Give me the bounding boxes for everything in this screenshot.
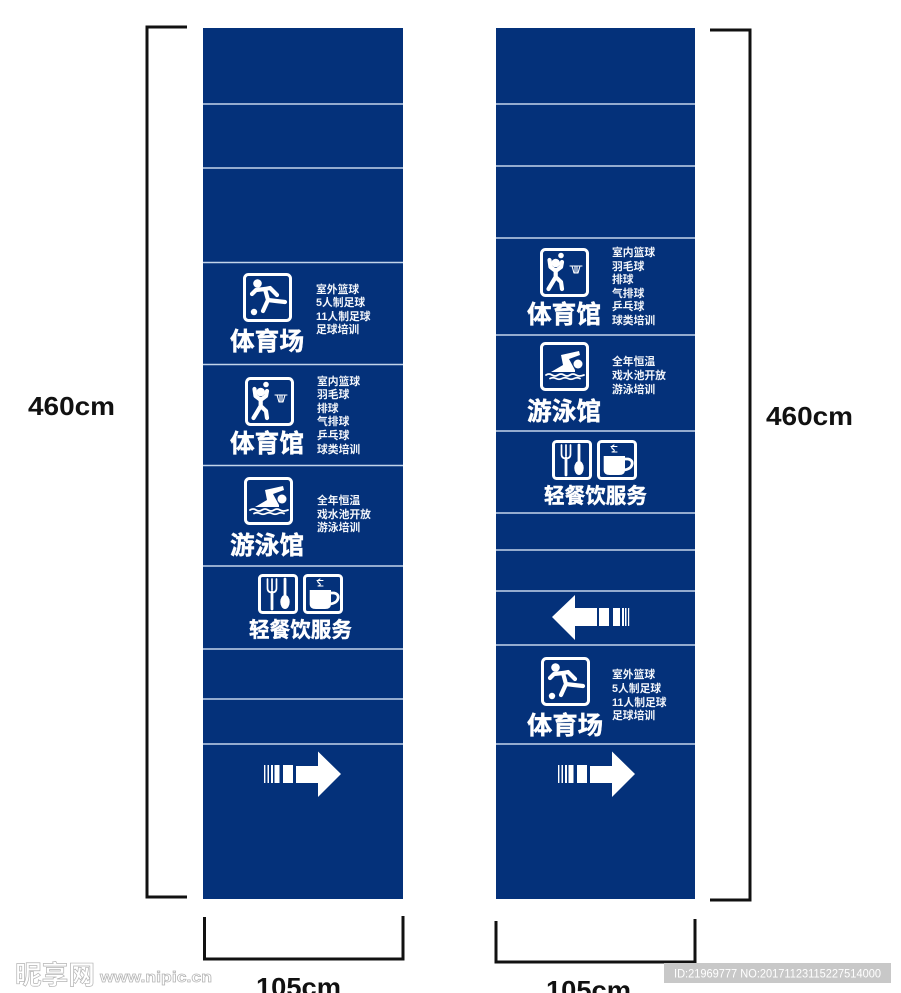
icon: fork and spoon bbox=[260, 576, 296, 612]
right sign: gymnasium section bbox=[527, 245, 655, 329]
list: gymnasium services: 排球 bbox=[612, 272, 634, 286]
panel: left sign bbox=[203, 28, 403, 899]
icon: basketball player bbox=[542, 250, 588, 296]
list: stadium services bbox=[316, 282, 371, 336]
list: swimming services bbox=[612, 354, 666, 396]
list: gymnasium services: 室内篮球 bbox=[612, 245, 655, 259]
list: gymnasium services: 羽毛球 bbox=[612, 259, 645, 273]
icon: swimmer bbox=[542, 344, 588, 390]
icon: right arrow (right sign) bbox=[558, 752, 635, 797]
title: stadium: 体育场 bbox=[230, 327, 304, 356]
list: stadium services: 室外篮球 bbox=[316, 282, 359, 296]
list: gymnasium services: 球类培训 bbox=[612, 313, 655, 327]
list: stadium services: 11人制足球 bbox=[612, 695, 667, 709]
watermark: site name bbox=[15, 960, 212, 990]
icon: football player bbox=[244, 274, 290, 320]
right sign: food section bbox=[544, 442, 647, 508]
right sign: swimming section bbox=[527, 344, 666, 426]
bracket: right height bbox=[710, 30, 750, 900]
list: swimming services: 全年恒温 bbox=[317, 493, 360, 507]
list: gymnasium services: 乒乓球 bbox=[317, 428, 350, 442]
title: gymnasium: 体育馆 bbox=[230, 429, 304, 458]
left sign: gymnasium section bbox=[230, 374, 360, 458]
watermark: site name: www.nipic.cn bbox=[99, 969, 212, 986]
left sign: food section bbox=[249, 576, 352, 642]
left sign: swimming section bbox=[230, 478, 371, 560]
icon: left arrow (right sign) bbox=[552, 595, 629, 640]
title: gymnasium: 体育馆 bbox=[527, 300, 601, 329]
title: light food service: 轻餐饮服务 bbox=[544, 485, 647, 508]
bracket: right width bbox=[496, 919, 695, 962]
icon: right arrow (left sign) bbox=[264, 752, 341, 797]
watermark: image id bar: ID:21969777 NO:20171123115227514000 bbox=[674, 968, 881, 980]
watermark: image id bar bbox=[664, 963, 891, 983]
icon: coffee cup bbox=[304, 576, 342, 612]
title: stadium: 体育场 bbox=[527, 711, 603, 740]
list: gymnasium services: 羽毛球 bbox=[317, 387, 350, 401]
list: stadium services: 11人制足球 bbox=[316, 309, 371, 323]
list: stadium services bbox=[612, 667, 667, 722]
list: stadium services: 足球培训 bbox=[612, 708, 655, 722]
label: right height: 460cm bbox=[766, 401, 853, 431]
list: gymnasium services: 气排球 bbox=[612, 286, 645, 300]
title: swimming pool: 游泳馆 bbox=[230, 532, 304, 560]
list: gymnasium services bbox=[317, 374, 360, 456]
icon: swimmer bbox=[246, 478, 292, 524]
list: gymnasium services: 乒乓球 bbox=[612, 299, 645, 313]
list: swimming services bbox=[317, 493, 371, 534]
left sign: stadium section bbox=[230, 274, 371, 356]
watermark: site name: 昵享网 bbox=[15, 960, 95, 990]
icon: coffee cup bbox=[598, 442, 636, 478]
bracket: left height bbox=[147, 27, 187, 897]
bracket: left width bbox=[204, 916, 403, 959]
list: gymnasium services: 室内篮球 bbox=[317, 374, 360, 388]
list: stadium services: 5人制足球 bbox=[316, 295, 365, 309]
title: light food service: 轻餐饮服务 bbox=[249, 619, 352, 642]
panel: right sign bbox=[496, 28, 695, 899]
icon: basketball player bbox=[246, 378, 292, 424]
list: swimming services: 全年恒温 bbox=[612, 354, 655, 368]
list: gymnasium services: 球类培训 bbox=[317, 442, 360, 456]
list: swimming services: 游泳培训 bbox=[317, 520, 360, 534]
right sign: stadium section bbox=[527, 658, 667, 740]
list: swimming services: 游泳培训 bbox=[612, 382, 655, 396]
list: swimming services: 戏水池开放 bbox=[317, 507, 371, 521]
list: gymnasium services: 气排球 bbox=[317, 414, 350, 428]
list: stadium services: 室外篮球 bbox=[612, 667, 655, 681]
list: gymnasium services: 排球 bbox=[317, 401, 339, 415]
icon: fork and spoon bbox=[554, 442, 590, 478]
list: swimming services: 戏水池开放 bbox=[612, 368, 666, 382]
label: left height: 460cm bbox=[28, 391, 115, 421]
list: gymnasium services bbox=[612, 245, 655, 327]
list: stadium services: 5人制足球 bbox=[612, 681, 661, 695]
title: swimming pool: 游泳馆 bbox=[527, 398, 601, 426]
list: stadium services: 足球培训 bbox=[316, 322, 359, 336]
icon: football player bbox=[542, 658, 588, 704]
